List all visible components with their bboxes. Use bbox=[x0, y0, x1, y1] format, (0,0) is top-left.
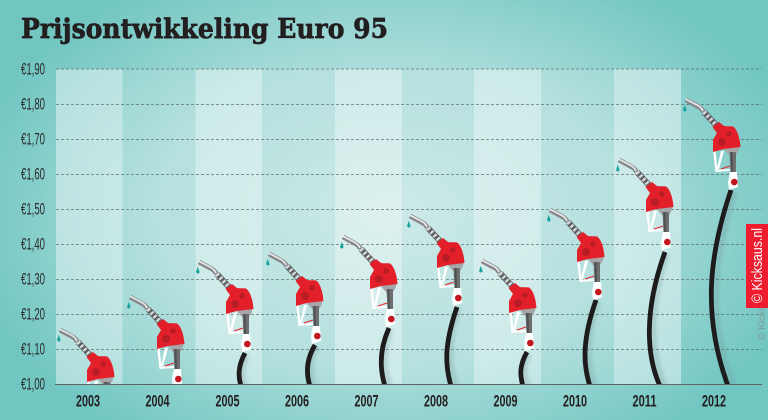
y axis labels bbox=[21, 60, 45, 394]
nozzle 2010 bbox=[547, 209, 604, 300]
y axis labels: €1,30 bbox=[21, 270, 45, 288]
hoses bbox=[239, 190, 731, 386]
credit tag: © Kicksaus.nl bbox=[750, 228, 766, 303]
title: Prijsontwikkeling Euro 95 bbox=[21, 14, 388, 45]
nozzle 2008 bbox=[407, 215, 464, 306]
credit tag bbox=[746, 224, 768, 308]
nozzle 2011 bbox=[616, 159, 674, 250]
nozzle 2003 bbox=[57, 328, 114, 384]
watermark credit: © Kicksaus.nl bbox=[757, 279, 768, 340]
y axis labels: €1,80 bbox=[21, 96, 45, 114]
year labels: 2010 bbox=[563, 392, 587, 410]
y axis labels: €1,20 bbox=[21, 306, 45, 324]
year labels: 2007 bbox=[354, 392, 378, 410]
year labels: 2004 bbox=[146, 392, 170, 410]
y axis labels: €1,90 bbox=[21, 60, 45, 78]
year labels: 2009 bbox=[494, 392, 518, 410]
year labels bbox=[76, 392, 726, 410]
year labels: 2005 bbox=[216, 392, 240, 410]
x axis baseline bbox=[55, 384, 762, 386]
y axis labels: €1,00 bbox=[21, 376, 45, 394]
year labels: 2003 bbox=[76, 392, 100, 410]
y axis labels: €1,10 bbox=[21, 340, 45, 358]
year labels: 2008 bbox=[424, 392, 448, 410]
nozzle 2004 bbox=[127, 296, 184, 387]
nozzle 2007 bbox=[340, 236, 398, 327]
year labels: 2006 bbox=[285, 392, 309, 410]
y axis labels: €1,50 bbox=[21, 200, 45, 218]
year labels: 2012 bbox=[702, 392, 726, 410]
year labels: 2011 bbox=[632, 392, 656, 410]
y axis labels: €1,60 bbox=[21, 166, 45, 184]
hose shadows bbox=[242, 192, 735, 386]
y axis labels: €1,70 bbox=[21, 130, 45, 148]
y axis labels: €1,40 bbox=[21, 236, 45, 254]
nozzle 2005 bbox=[196, 261, 254, 352]
nozzle 2012 bbox=[683, 99, 740, 190]
nozzle 2009 bbox=[479, 260, 536, 351]
column bands bbox=[56, 69, 681, 384]
nozzle 2006 bbox=[266, 253, 324, 344]
